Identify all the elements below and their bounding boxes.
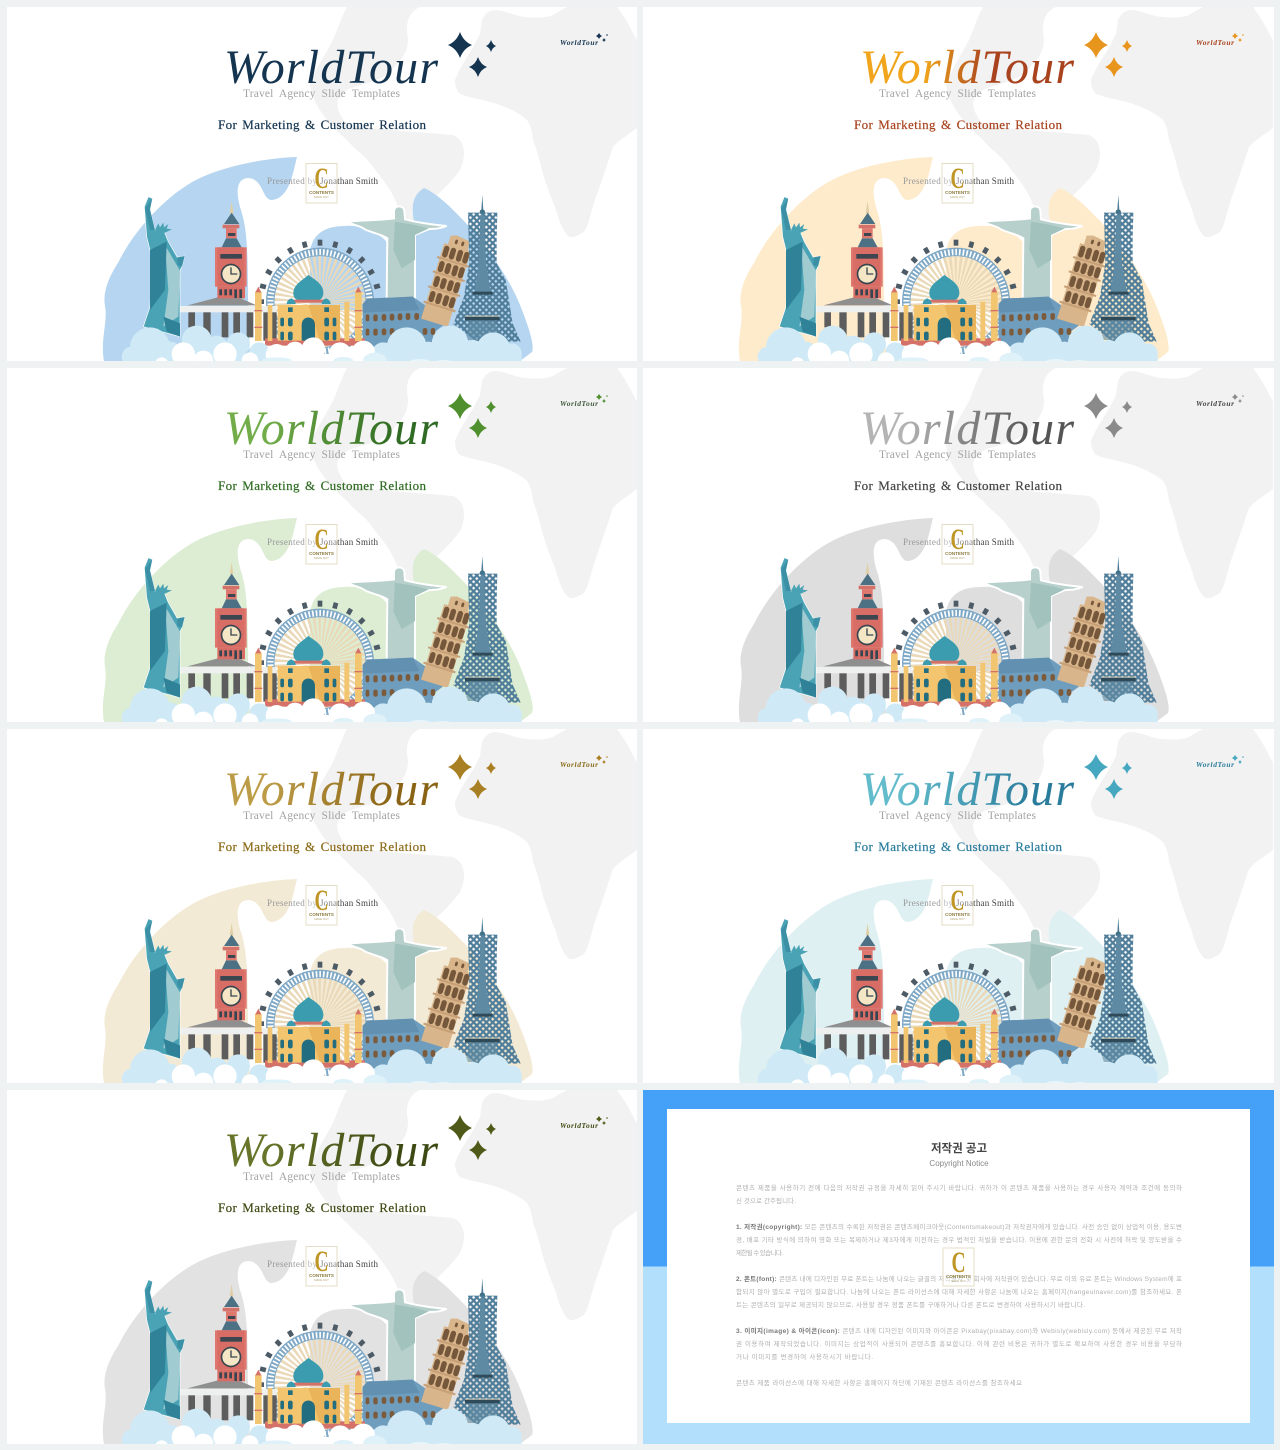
pale teal backdrop blobs [739, 879, 1169, 1083]
logo watermark [306, 884, 337, 925]
logo watermark [943, 1246, 974, 1286]
presenter: Presented by [903, 898, 954, 908]
logo watermark: MAKE OUT [950, 917, 965, 921]
world map background [310, 368, 637, 598]
world map background [310, 1090, 637, 1320]
logo watermark: CONTENTS [309, 912, 334, 917]
notice body text: 거나 이미지를 변경하여 사용하시기 바랍니다. [736, 1352, 873, 1361]
small brand mark: WorldTour [560, 38, 598, 47]
notice body text [736, 1183, 1182, 1387]
logo watermark [942, 523, 973, 564]
tagline: For Marketing & Customer Relation [218, 117, 426, 132]
presenter: Jonathan Smith [320, 1259, 378, 1269]
notice body text: 1. 저작권(copyright): 모든 콘텐츠의 수록된 저작권은 콘텐츠메이크아웃(Contentsmakeout)과 저작권자에게 있습니다. 사전 승인 없이 상업적 이용, 용도변 [736, 1222, 1182, 1231]
panel: slide 4 grey [643, 368, 1274, 722]
logo watermark [306, 162, 337, 203]
notice body text: 권 이용하여 제작되었습니다. 이미지는 상업적이 사용되어 콘텐츠를 홍보합니다. 이에 관련 비용은 귀하가 별도로 확보하여 사용한 경우 비용을 부담하 [736, 1339, 1182, 1348]
logo watermark [942, 884, 973, 925]
notice body text: 제한될 수 있습니다. [736, 1248, 783, 1257]
notice body text: 경, 배포 기타 방식에 의하여 영화 또는 복제하거나 제3자에게 이전하는 경우 법적인 처벌을 받습니다. 이용에 관한 문의 전화 시 사전에 허락 및 양도받을 수 [736, 1235, 1182, 1244]
presenter: Presented by [267, 176, 318, 186]
tagline: For Marketing & Customer Relation [218, 1200, 426, 1215]
world map background [946, 729, 1273, 959]
small brand mark: WorldTour [1196, 399, 1234, 408]
panel: slide 3 green [7, 368, 637, 722]
title: WorldTour [224, 763, 438, 816]
sparkle stars [1084, 393, 1244, 438]
tagline: For Marketing & Customer Relation [854, 839, 1062, 854]
presenter: Presented by [267, 537, 318, 547]
logo watermark: CONTENTS [945, 551, 970, 556]
grey backdrop blobs [103, 1240, 533, 1444]
tagline: For Marketing & Customer Relation [218, 839, 426, 854]
cream backdrop blobs [739, 157, 1169, 361]
logo watermark: MAKE OUT [951, 1279, 966, 1283]
presenter: Presented by [903, 537, 954, 547]
sparkle stars [448, 754, 608, 799]
world map background [310, 729, 637, 959]
sparkle stars [448, 393, 608, 438]
logo watermark: MAKE OUT [314, 556, 329, 560]
landmarks illustration [122, 556, 522, 732]
sparkle stars [448, 32, 608, 77]
logo watermark: CONTENTS [945, 190, 970, 195]
title: WorldTour [224, 41, 438, 94]
landmarks illustration [122, 1278, 522, 1450]
tagline: For Marketing & Customer Relation [218, 478, 426, 493]
landmarks illustration [758, 556, 1158, 732]
title: WorldTour [224, 1124, 438, 1177]
green backdrop blobs [103, 518, 533, 722]
logo watermark: C [951, 1246, 966, 1279]
notice body text: 콘텐츠 제품을 사용하기 전에 다음의 저작권 규정을 자세히 읽어 주시기 바랍니다. 귀하가 이 콘텐츠 제품을 사용하는 경우 사용자 계약과 조건에 동의하 [736, 1183, 1182, 1192]
small brand mark: WorldTour [560, 1121, 598, 1130]
presenter: Presented by [267, 898, 318, 908]
notice heading: 저작권 공고 [931, 1141, 987, 1155]
notice body text: 신 것으로 간주됩니다. [736, 1196, 796, 1205]
notice body text: 함되지 않아 별도로 구입이 필요합니다. 나눔에 나오는 폰트 라이선스에 대해 자세한 사항은 나눔에 나오는 홈페이지(hangeulnaver.com)를 참조하세요. 폰 [736, 1287, 1182, 1296]
logo watermark: CONTENTS [309, 190, 334, 195]
small brand mark: WorldTour [1196, 38, 1234, 47]
sparkle stars [448, 1115, 608, 1160]
white notice sheet [667, 1109, 1250, 1423]
subtitle: Travel Agency Slide Templates [879, 810, 1037, 822]
panel: slide 2 orange [643, 7, 1274, 361]
sparkle stars [1084, 754, 1244, 799]
tagline: For Marketing & Customer Relation [854, 478, 1062, 493]
world map background [946, 368, 1273, 598]
subtitle: Travel Agency Slide Templates [243, 449, 401, 461]
presenter: Jonathan Smith [956, 176, 1014, 186]
presenter: Jonathan Smith [320, 176, 378, 186]
title: WorldTour [860, 763, 1074, 816]
blue backdrop blobs [103, 157, 533, 361]
notice body text: 2. 폰트(font): 콘텐츠 내에 디자인된 무료 폰트는 나눔에 나오는 글꼴의 저작권자 및 회사에 저작권이 있습니다. 무료 이외 유료 폰트는 Windows System에 포 [736, 1274, 1182, 1283]
logo watermark: C [950, 884, 965, 917]
logo watermark: C [950, 523, 965, 556]
presenter: Presented by [267, 1259, 318, 1269]
world map background [946, 7, 1273, 237]
landmarks illustration [122, 195, 522, 371]
small brand mark: WorldTour [560, 760, 598, 769]
logo watermark [942, 162, 973, 203]
notice body text: 3. 이미지(image) & 아이콘(icon): 콘텐츠 내에 디자인된 이미지와 아이콘은 Pixabay(pixabay.com)와 Webisly(webisly.com) 등에서 제공된 무료 저작 [736, 1326, 1182, 1335]
logo watermark: CONTENTS [309, 1273, 334, 1278]
title: WorldTour [860, 402, 1074, 455]
panel: slide 7 olive [7, 1090, 637, 1444]
logo watermark: C [314, 162, 329, 195]
notice body text: 콘텐츠 제품 라이선스에 대해 자세한 사항은 홈페이지 하단에 기재된 콘텐츠 라이선스를 참조하세요 [736, 1378, 1022, 1387]
grey backdrop blobs [739, 518, 1169, 722]
small brand mark: WorldTour [1196, 760, 1234, 769]
panel: slide 8 copyright notice [643, 1090, 1274, 1444]
subtitle: Travel Agency Slide Templates [243, 88, 401, 100]
landmarks illustration [758, 195, 1158, 371]
logo watermark: CONTENTS [946, 1274, 971, 1279]
sparkle stars [1084, 32, 1244, 77]
logo watermark: MAKE OUT [314, 195, 329, 199]
notice body text: 트는 콘텐츠의 일부로 제공되지 않으므로, 사용할 경우 정품 폰트를 구매하거나 다른 폰트로 변경하여 사용하시기 바랍니다. [736, 1300, 1085, 1309]
logo watermark: CONTENTS [945, 912, 970, 917]
logo watermark: MAKE OUT [950, 556, 965, 560]
logo watermark: CONTENTS [309, 551, 334, 556]
subtitle: Travel Agency Slide Templates [243, 810, 401, 822]
small brand mark: WorldTour [560, 399, 598, 408]
title: WorldTour [860, 41, 1074, 94]
subtitle: Travel Agency Slide Templates [879, 88, 1037, 100]
presenter: Jonathan Smith [956, 537, 1014, 547]
landmarks illustration [122, 917, 522, 1093]
panel: slide 5 gold [7, 729, 637, 1083]
subtitle: Travel Agency Slide Templates [243, 1171, 401, 1183]
subtitle: Travel Agency Slide Templates [879, 449, 1037, 461]
tagline: For Marketing & Customer Relation [854, 117, 1062, 132]
landmarks illustration [758, 917, 1158, 1093]
presenter: Jonathan Smith [320, 537, 378, 547]
logo watermark [306, 523, 337, 564]
logo watermark [306, 1245, 337, 1286]
title: WorldTour [224, 402, 438, 455]
beige backdrop blobs [103, 879, 533, 1083]
panel: slide 1 navy [7, 7, 637, 361]
presenter: Presented by [903, 176, 954, 186]
logo watermark: MAKE OUT [314, 917, 329, 921]
notice subheading: Copyright Notice [929, 1159, 989, 1168]
logo watermark: MAKE OUT [950, 195, 965, 199]
logo watermark: C [314, 1245, 329, 1278]
presenter: Jonathan Smith [956, 898, 1014, 908]
panel: slide 6 teal [643, 729, 1274, 1083]
logo watermark: C [950, 162, 965, 195]
logo watermark: C [314, 884, 329, 917]
logo watermark: C [314, 523, 329, 556]
presenter: Jonathan Smith [320, 898, 378, 908]
logo watermark: MAKE OUT [314, 1278, 329, 1282]
blue top band [643, 1090, 1274, 1266]
world map background [310, 7, 637, 237]
